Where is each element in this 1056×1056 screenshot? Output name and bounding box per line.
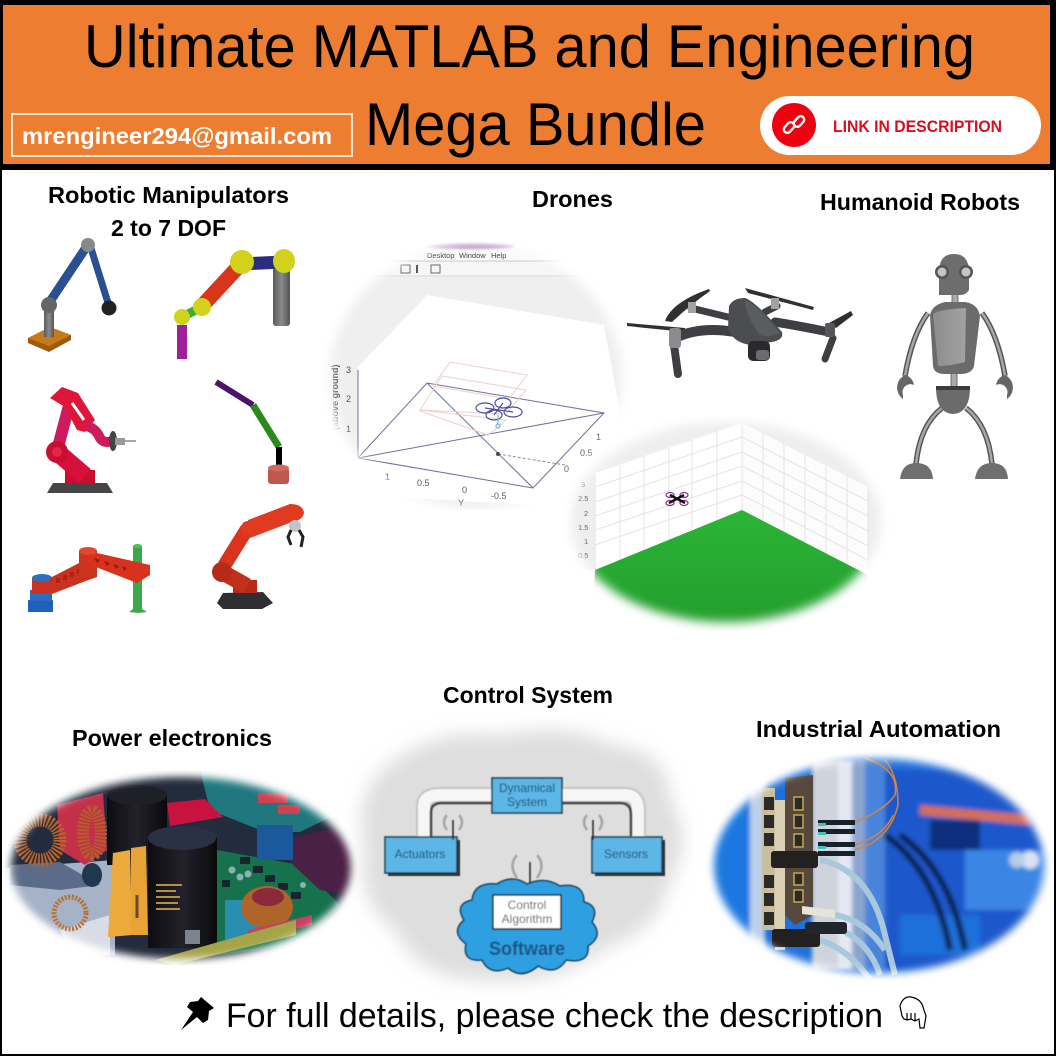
panels (762, 788, 775, 930)
quadrotor (476, 398, 522, 428)
drone simulation plot 2 (571, 422, 881, 630)
head (939, 254, 969, 295)
drone photo (627, 288, 853, 374)
pelvis (936, 387, 970, 414)
window menu bar: Window (459, 251, 486, 260)
humanoid robot (897, 254, 1013, 479)
heading: robotic manipulators: Robotic Manipulators (48, 182, 289, 208)
axis labels: 1.5 (578, 523, 588, 532)
axis labels: 0.5 (578, 551, 588, 560)
blurred background (713, 760, 1045, 970)
box: dynamical system (492, 778, 562, 813)
torso (930, 302, 980, 374)
axis tick labels: 0 (462, 485, 467, 495)
axis tick labels (330, 364, 601, 508)
icon: pushpin (181, 997, 214, 1030)
footer note: For full details, please check the description (226, 997, 883, 1035)
title line 2: Mega Bundle (365, 91, 706, 158)
left silver area (5, 860, 115, 955)
axis tick labels: 0.5 (417, 478, 430, 488)
software cloud (457, 879, 597, 974)
robot arm 5: SCARA (28, 544, 150, 613)
ports (764, 797, 774, 925)
heading: robotic manipulators: 2 to 7 DOF (111, 215, 226, 241)
right toroid (241, 886, 293, 928)
capacitor front (148, 826, 217, 948)
icon: chain link (782, 115, 806, 134)
axis labels: 2.5 (578, 494, 588, 503)
box: dynamical system: Dynamical (499, 781, 555, 795)
arms (905, 313, 1005, 464)
axis tick labels: 1 (385, 472, 390, 482)
axis tick labels: 0 (564, 464, 569, 474)
propellers (627, 288, 853, 332)
capacitor back (107, 785, 167, 865)
header banner (0, 0, 1056, 170)
robot arm 2: multi-colour (174, 249, 295, 359)
photo: industrial automation (700, 750, 1056, 980)
heading: control system: Control System (443, 682, 613, 708)
icon: pointing hand (900, 997, 926, 1028)
heading: drones: Drones (532, 186, 613, 212)
control system diagram: Software (489, 939, 565, 960)
axis labels: 1 (584, 537, 588, 546)
small components (222, 857, 301, 899)
heading: power electronics: Power electronics (72, 725, 272, 751)
control system diagram (361, 730, 682, 981)
axis tick labels: 1 (346, 424, 351, 434)
blue riser (257, 825, 293, 860)
axis tick labels: (above ground) (330, 364, 340, 430)
red block left (57, 793, 107, 865)
heading: humanoid robots: Humanoid Robots (820, 189, 1020, 215)
link pill (760, 96, 1041, 155)
robot arm 3: crimson with tool (46, 387, 136, 493)
axis tick labels: 1 (596, 432, 601, 442)
left toroids (20, 811, 101, 929)
ethernet cables (820, 860, 895, 980)
hands (897, 375, 914, 399)
red block (167, 799, 223, 826)
email box: mrengineer294@gmail.com (22, 123, 332, 149)
pink strip and board bottom (248, 915, 312, 934)
yellow capacitors (108, 846, 148, 937)
axis tick labels: 0.5 (580, 448, 593, 458)
control algorithm box: Control (508, 898, 546, 912)
purple block (293, 828, 356, 895)
window menu bar (380, 242, 572, 276)
grey cloud background (361, 730, 682, 981)
box: sensors: Sensors (604, 847, 648, 861)
title line 1: Ultimate MATLAB and Engineering (84, 13, 975, 80)
box: dynamical system: System (507, 795, 547, 809)
wire cage lines (358, 370, 604, 488)
axis labels: 2 (584, 509, 588, 518)
robot arm 6: red with gripper (212, 504, 304, 609)
link pill: LINK IN DESCRIPTION (833, 117, 1002, 136)
wall grid (595, 423, 868, 575)
heading: industrial automation: Industrial Automation (756, 716, 1001, 742)
feet (900, 463, 933, 479)
arms and legs (674, 306, 833, 374)
box: actuators (385, 837, 460, 876)
box: sensors (592, 837, 665, 876)
green board (217, 850, 340, 955)
photo: power electronics (0, 770, 360, 965)
loop arrows (424, 795, 638, 838)
window menu bar: Desktop (427, 251, 455, 260)
axis tick labels: -0.5 (491, 491, 507, 501)
email box (12, 114, 352, 156)
teal top board (200, 770, 335, 832)
axis tick labels: 2 (346, 394, 351, 404)
small quadcopter (666, 492, 688, 506)
axis tick labels: 3 (346, 365, 351, 375)
connectors (771, 851, 818, 868)
drone simulation plot 1 (330, 242, 622, 508)
drone body (728, 298, 782, 345)
box: actuators: Actuators (395, 847, 445, 861)
antennas (444, 815, 602, 885)
robot arm 4: purple green black (216, 382, 289, 484)
axis labels (578, 480, 588, 560)
axis tick labels: Y (458, 498, 464, 508)
green floor (594, 510, 868, 630)
neck and waist (952, 294, 958, 305)
white lower margin (590, 570, 595, 574)
control algorithm box (493, 895, 561, 929)
dark coil (82, 863, 102, 887)
axis labels: 3 (581, 480, 585, 489)
robot arm 1: blue two-link (28, 238, 116, 352)
heading: robotic manipulators (48, 182, 289, 241)
window menu bar: Help (491, 251, 506, 260)
control algorithm box: Algorithm (502, 912, 552, 926)
fibre cables (855, 758, 898, 850)
